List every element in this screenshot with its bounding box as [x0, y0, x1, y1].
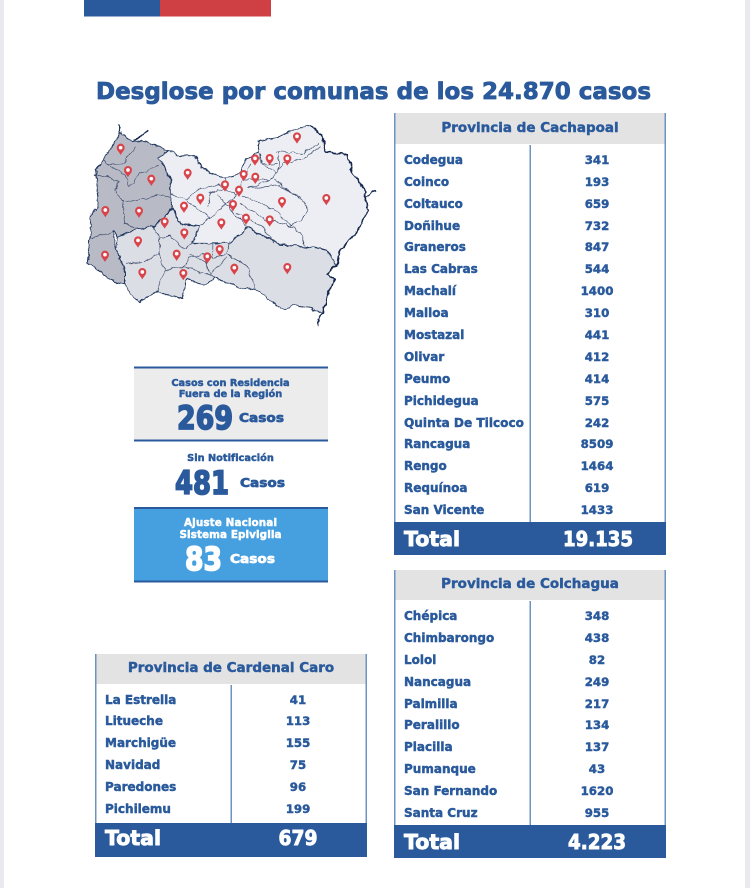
rows: Colchagua communes: Placilla	[404, 740, 453, 754]
rows: Colchagua communes: 1620	[581, 784, 613, 798]
rows: Cachapoal communes: 412	[585, 350, 609, 364]
rows: Colchagua communes: 134	[585, 718, 609, 732]
callout: without notification	[175, 452, 285, 502]
province area: Colchagua	[117, 208, 337, 313]
table: Provincia de Colchagua: Provincia de Colchagua	[441, 576, 619, 592]
callout: national adjustment: Casos	[230, 551, 275, 566]
rows: Cachapoal communes: 8509	[581, 437, 613, 451]
rows: Cachapoal communes: 732	[585, 219, 609, 233]
rows: Colchagua communes: Pumanque	[404, 762, 476, 776]
total: Cachapoal: 19.135	[563, 527, 633, 551]
callout: residents outside the region	[134, 366, 328, 442]
rows: Cachapoal communes: Requínoa	[404, 481, 468, 495]
total: Cardenal Caro	[105, 826, 318, 850]
rows: Colchagua communes: 249	[585, 675, 609, 689]
total: Colchagua: Total	[404, 830, 460, 854]
rows: Cachapoal communes: 1433	[581, 503, 613, 517]
rows: Cardenal Caro communes: 199	[286, 802, 310, 816]
heavy eastern and northern border	[119, 123, 375, 327]
callout: national adjustment: Ajuste Nacional	[184, 517, 277, 529]
rows: Colchagua communes: 438	[585, 631, 609, 645]
rows: Colchagua communes	[404, 609, 613, 820]
table: Provincia de Cardenal Caro: Provincia de Cardenal Caro	[128, 660, 334, 676]
total: Cardenal Caro: 679	[278, 826, 318, 850]
rows: Cachapoal communes: 242	[585, 416, 609, 430]
rows: Cachapoal communes: 193	[585, 175, 609, 189]
rows: Cardenal Caro communes	[105, 693, 310, 816]
rows: Colchagua communes: Chépica	[404, 609, 457, 623]
rows: Cachapoal communes: 544	[585, 262, 609, 276]
table: Provincia de Cachapoal: Provincia de Cachapoal	[441, 120, 619, 136]
callout: national adjustment: Sistema Epivigila	[180, 529, 282, 541]
rows: Cachapoal communes: 341	[585, 153, 609, 167]
rows: Cachapoal communes: Pichidegua	[404, 394, 479, 408]
rows: Cachapoal communes: Graneros	[404, 240, 466, 254]
commune boundaries	[92, 143, 320, 292]
rows: Cachapoal communes: Codegua	[404, 153, 463, 167]
rows: Cardenal Caro communes: 113	[286, 714, 310, 728]
rows: Cachapoal communes: 310	[585, 306, 609, 320]
rows: Colchagua communes: Santa Cruz	[404, 806, 478, 820]
rows: Cachapoal communes: 659	[585, 197, 609, 211]
map of the region with commune pins	[87, 123, 375, 327]
rows: Cachapoal communes: Olivar	[404, 350, 444, 364]
rows: Cardenal Caro communes: 96	[290, 780, 306, 794]
callout: without notification: Casos	[240, 475, 285, 490]
callout: without notification: 481	[175, 464, 229, 502]
rows: Cardenal Caro communes: La Estrella	[105, 693, 176, 707]
rows: Cachapoal communes: 847	[585, 240, 609, 254]
table: Provincia de Cardenal Caro	[95, 654, 367, 857]
rows: Cachapoal communes: 619	[585, 481, 609, 495]
rows: Cachapoal communes: Doñihue	[404, 219, 460, 233]
total: Cardenal Caro: Total	[105, 826, 161, 850]
rows: Cachapoal communes: Coinco	[404, 175, 449, 189]
callout: national adjustment	[134, 507, 328, 582]
rows: Colchagua communes: San Fernando	[404, 784, 497, 798]
location pins	[101, 132, 330, 280]
rows: Cardenal Caro communes: Paredones	[105, 780, 176, 794]
rows: Colchagua communes: Lolol	[404, 653, 436, 667]
rows: Cachapoal communes: Rengo	[404, 459, 447, 473]
rows: Cachapoal communes: 414	[585, 372, 609, 386]
rows: Cachapoal communes: Mostazal	[404, 328, 464, 342]
province areas and commune boundaries	[87, 123, 375, 327]
rows: Cachapoal communes: 1464	[581, 459, 613, 473]
rows: Cardenal Caro communes: Navidad	[105, 758, 160, 772]
callout: residents outside the region: 269	[177, 399, 233, 437]
total: Colchagua	[404, 830, 626, 854]
rows: Colchagua communes: 43	[589, 762, 605, 776]
rows: Cachapoal communes: 441	[585, 328, 609, 342]
callout: residents outside the region: Casos	[239, 410, 284, 425]
province area: Cardenal Caro	[87, 133, 172, 285]
rows: Cardenal Caro communes: 155	[286, 736, 310, 750]
total: Colchagua: 4.223	[568, 830, 626, 854]
rows: Cachapoal communes: Quinta De Tilcoco	[404, 416, 524, 430]
flag bar header	[84, 0, 271, 16]
rows: Colchagua communes: Palmilla	[404, 697, 458, 711]
rows: Cachapoal communes: Coltauco	[404, 197, 463, 211]
rows: Cardenal Caro communes: 41	[290, 693, 306, 707]
callout: national adjustment: 83	[185, 540, 222, 578]
rows: Cachapoal communes: Peumo	[404, 372, 450, 386]
table: Provincia de Colchagua	[394, 570, 666, 858]
rows: Colchagua communes: 82	[589, 653, 605, 667]
rows: Cachapoal communes: Machalí	[404, 284, 457, 298]
rows: Cardenal Caro communes: Litueche	[105, 714, 163, 728]
rows: Cardenal Caro communes: Pichilemu	[105, 802, 171, 816]
rows: Cachapoal communes: San Vicente	[404, 503, 484, 517]
rows: Cachapoal communes: 1400	[581, 284, 613, 298]
total: Cachapoal: Total	[404, 527, 460, 551]
table: Provincia de Cachapoal	[394, 113, 666, 555]
rows: Cachapoal communes: Rancagua	[404, 437, 470, 451]
rows: Colchagua communes: Chimbarongo	[404, 631, 494, 645]
callout: residents outside the region: Fuera de la Región	[179, 388, 282, 400]
callout: without notification: Sin Notificación	[187, 452, 274, 464]
title: Desglose por comunas de los 24.870 casos	[96, 77, 651, 105]
rows: Colchagua communes: 137	[585, 740, 609, 754]
rows: Cachapoal communes: 575	[585, 394, 609, 408]
rows: Cachapoal communes: Las Cabras	[404, 262, 478, 276]
total: Cachapoal	[404, 527, 633, 551]
rows: Colchagua communes: Peralillo	[404, 718, 460, 732]
rows: Colchagua communes: Nancagua	[404, 675, 471, 689]
rows: Colchagua communes: 217	[585, 697, 609, 711]
rows: Cachapoal communes	[404, 153, 613, 517]
rows: Colchagua communes: 955	[585, 806, 609, 820]
rows: Cardenal Caro communes: Marchigüe	[105, 736, 176, 750]
rows: Colchagua communes: 348	[585, 609, 609, 623]
rows: Cachapoal communes: Malloa	[404, 306, 449, 320]
callout: residents outside the region: Casos con Residencia	[171, 378, 290, 389]
rows: Cardenal Caro communes: 75	[290, 758, 306, 772]
province area: Cachapoal	[157, 125, 368, 265]
